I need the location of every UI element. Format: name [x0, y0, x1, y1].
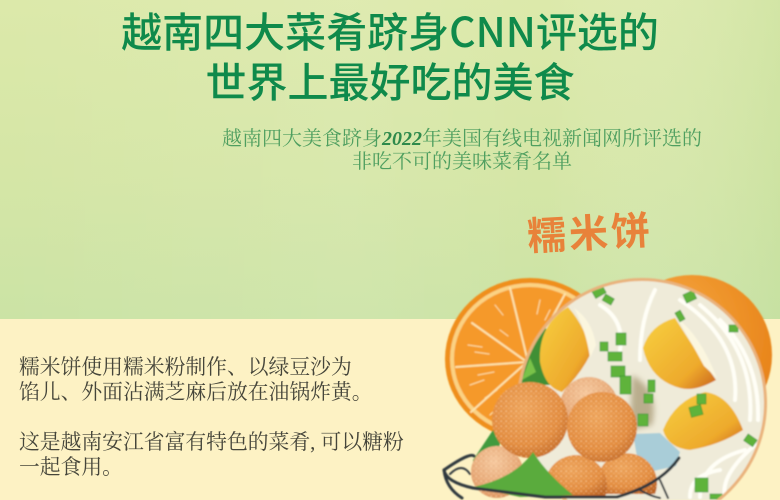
noodles	[600, 290, 758, 497]
icon: whole orange	[612, 275, 772, 435]
icon: noodle soup bowl	[517, 278, 767, 500]
greens at left edge	[520, 328, 551, 386]
subtitle: 越南四大美食跻身2022年美国有线电视新闻网所评选的	[222, 127, 702, 150]
text block: description: 一起食用。	[19, 456, 123, 479]
icon: orange slice	[445, 278, 615, 440]
text block: description: 馅儿、外面沾满芝麻后放在油锅炸黄。	[19, 381, 373, 404]
illustration: food collage	[444, 275, 772, 500]
broth shadow	[630, 375, 654, 430]
panel: green header background	[0, 0, 780, 319]
icon: woven basket	[444, 455, 679, 498]
text block: description: 这是越南安江省富有特色的菜肴, 可以糖粉	[19, 431, 404, 454]
subtitle: 非吃不可的美味菜肴名单	[352, 150, 572, 173]
text block: description	[19, 356, 404, 479]
panel: cream lower background	[0, 319, 780, 500]
icon: basket back leaf	[473, 430, 500, 470]
icon: sesame balls	[471, 377, 657, 498]
icon: banana leaf	[473, 452, 573, 497]
heading: dish name: 糯米饼	[526, 200, 654, 262]
title	[121, 0, 659, 109]
text block: description: 糯米饼使用糯米粉制作、以绿豆沙为	[19, 356, 352, 379]
scallions	[592, 286, 757, 499]
subtitle	[222, 127, 702, 173]
title: 世界上最好吃的美食	[206, 49, 574, 109]
fried cakes	[540, 307, 743, 450]
icon: blue napkin	[633, 433, 680, 474]
title: 越南四大菜肴跻身CNN评选的	[121, 0, 659, 59]
